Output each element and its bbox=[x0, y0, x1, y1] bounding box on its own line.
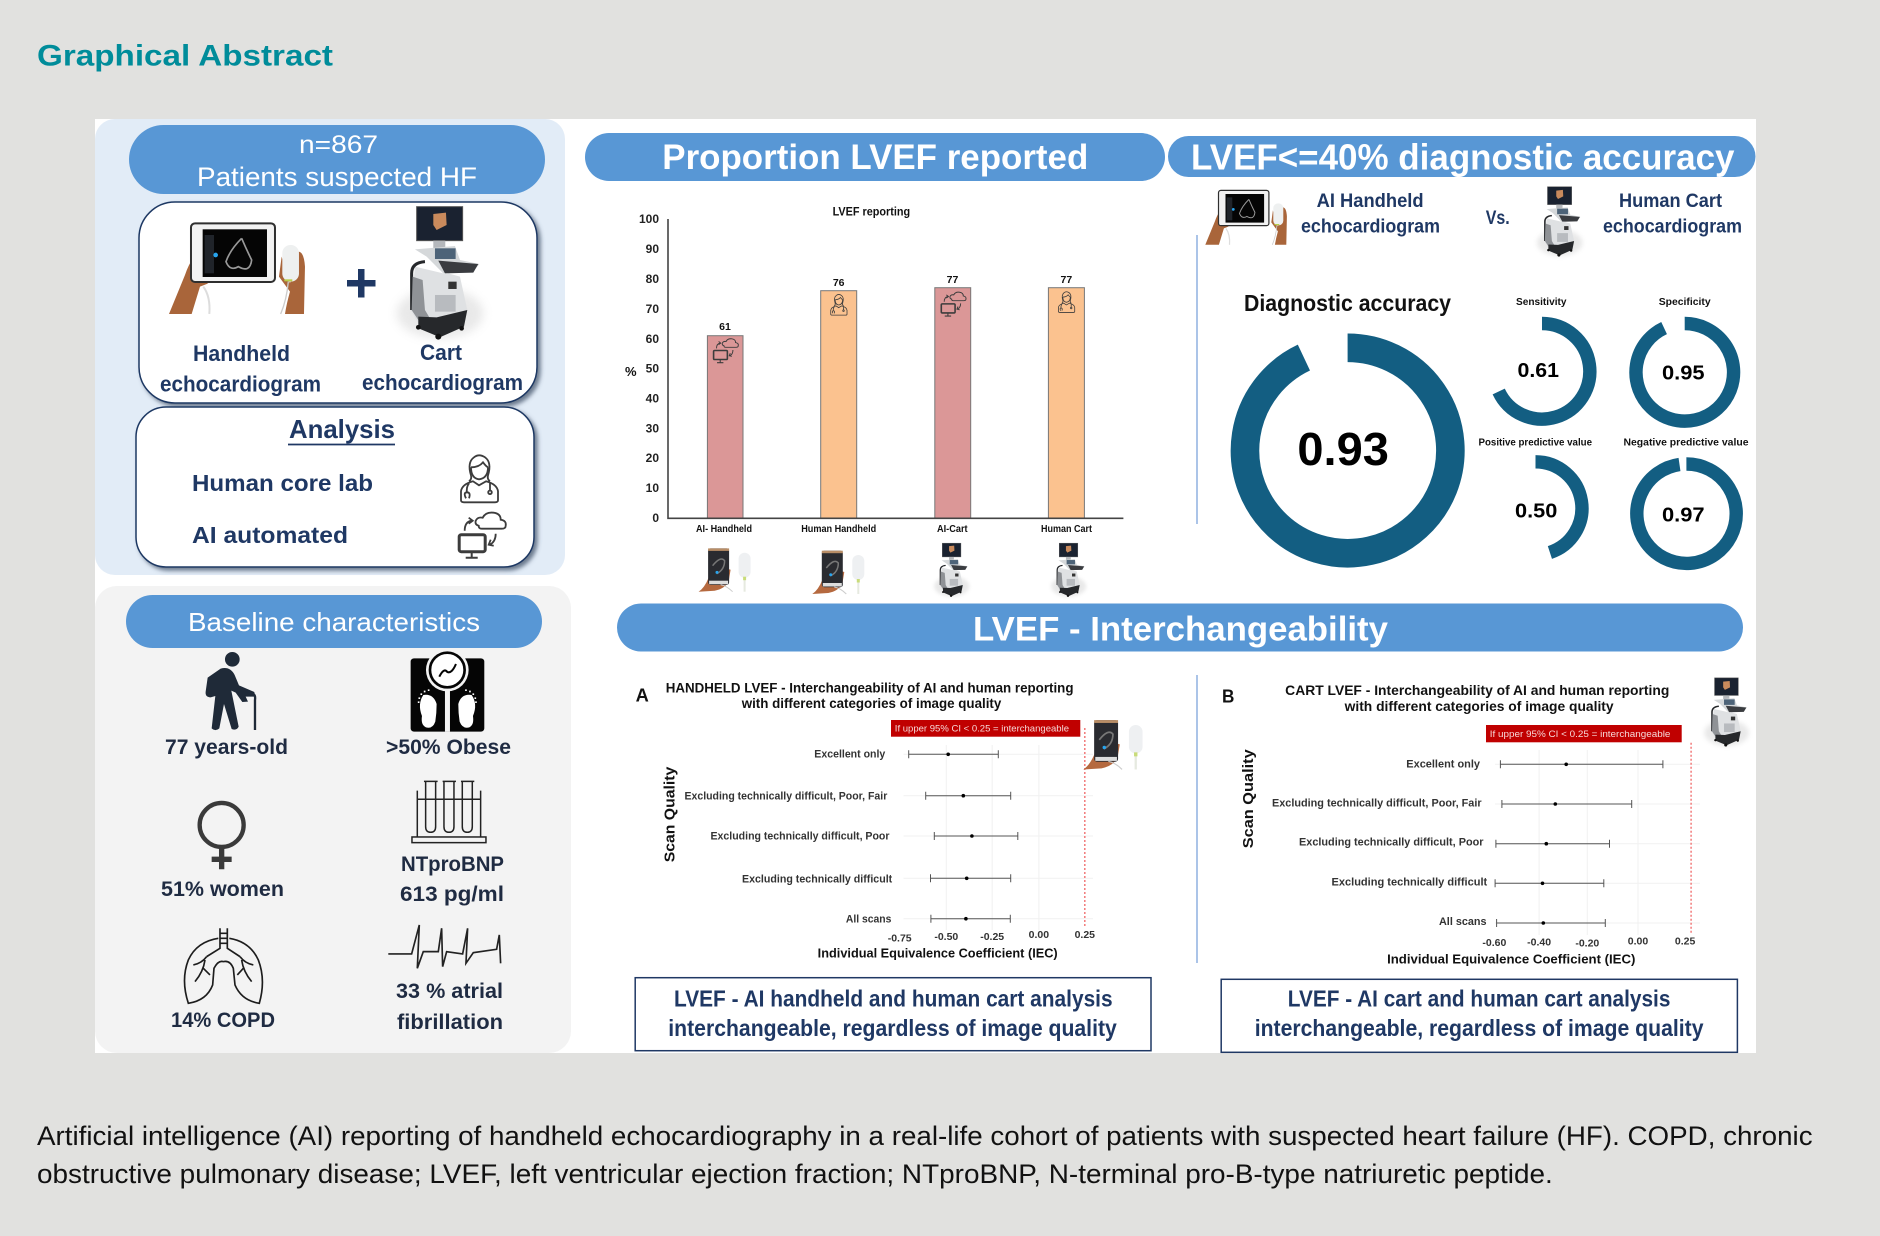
chart title A: HANDHELD LVEF - Interchangeability of AI and human reporting bbox=[666, 680, 1074, 696]
chart title B: CART LVEF - Interchangeability of AI and human reporting bbox=[1285, 683, 1669, 698]
label: human cart: echocardiogram bbox=[1603, 217, 1742, 238]
forest plot B: Excellent only bbox=[1406, 758, 1481, 770]
caption bbox=[37, 1121, 1813, 1189]
bar chart: LVEF reporting bbox=[833, 206, 910, 218]
heading: patients: Patients suspected HF bbox=[197, 162, 477, 192]
forest plot A: -0.25 bbox=[980, 931, 1004, 943]
forest plot A: Excellent only bbox=[814, 749, 886, 761]
label: cart bbox=[362, 340, 523, 395]
forest plot A bbox=[663, 720, 1095, 960]
label: NTproBNP: NTproBNP bbox=[401, 852, 504, 876]
icon: human on bar 4 bbox=[1058, 292, 1075, 312]
icon: human on bar 2 bbox=[831, 294, 847, 315]
bar: human handheld: 76 bbox=[833, 277, 845, 289]
bar: AI cart bbox=[935, 274, 971, 518]
bar: AI cart: 77 bbox=[947, 274, 958, 286]
bar: AI handheld: 61 bbox=[719, 321, 731, 333]
forest plot A: Excluding technically difficult, Poor, Fair bbox=[684, 790, 888, 802]
bar chart: 10 bbox=[646, 481, 659, 495]
forest plot B: Excluding technically difficult, Poor bbox=[1299, 836, 1484, 848]
label: NTproBNP: 613 pg/ml bbox=[400, 882, 504, 906]
bar chart: 50 bbox=[646, 362, 659, 376]
forest plot A: Individual Equivalence Coefficient (IEC) bbox=[818, 946, 1058, 960]
threshold note A: If upper 95% CI < 0.25 = interchangeable bbox=[895, 723, 1069, 734]
forest plot B: -0.40 bbox=[1527, 936, 1551, 948]
donut: positive predictive value 0.50: 0.50 bbox=[1515, 500, 1557, 522]
icon: elderly person with cane bbox=[206, 652, 255, 730]
icon: female symbol bbox=[200, 803, 244, 869]
donut: negative predictive value 0.97 bbox=[1624, 437, 1749, 563]
icon: lungs bbox=[184, 928, 262, 1003]
bar: human cart bbox=[1048, 274, 1084, 518]
forest plot A: 0.00 bbox=[1029, 929, 1049, 941]
forest plot B: Individual Equivalence Coefficient (IEC) bbox=[1387, 952, 1635, 966]
threshold note B bbox=[1486, 725, 1682, 742]
conclusion box B: interchangeable, regardless of image quality bbox=[1255, 1015, 1704, 1041]
label: handheld: echocardiogram bbox=[160, 372, 321, 396]
card: analysis: Human core lab bbox=[192, 470, 373, 496]
bar chart: 60 bbox=[646, 332, 659, 346]
icon: handheld under bar 2 bbox=[812, 551, 864, 594]
label: atrial fibrillation: fibrillation bbox=[397, 1010, 503, 1034]
heading: baseline bbox=[126, 595, 542, 648]
forest plot A: -0.50 bbox=[934, 931, 958, 943]
conclusion box B bbox=[1221, 979, 1737, 1052]
icon: cart under bar 4 bbox=[1051, 543, 1086, 597]
panel letter B: B bbox=[1222, 687, 1234, 707]
panel: study design bbox=[95, 119, 565, 575]
conclusion box A: LVEF - AI handheld and human cart analysis bbox=[674, 986, 1113, 1012]
panel: diagnostic accuracy bbox=[1168, 136, 1756, 563]
donut: diagnostic accuracy 0.93 bbox=[1244, 290, 1451, 553]
donut: positive predictive value 0.50 bbox=[1478, 437, 1592, 552]
label: handheld: Handheld bbox=[193, 341, 290, 366]
panel B: cart interchangeability bbox=[1221, 678, 1749, 1052]
forest plot B: Scan Quality bbox=[1241, 749, 1257, 848]
label: AI handheld: AI Handheld bbox=[1317, 191, 1424, 212]
chart title B bbox=[1285, 683, 1669, 714]
label: NTproBNP bbox=[400, 852, 504, 906]
forest plot B bbox=[1241, 725, 1700, 966]
label: human cart bbox=[1603, 191, 1742, 238]
bar chart: 90 bbox=[646, 242, 659, 256]
label: cart: Cart bbox=[420, 340, 463, 365]
forest plot B: All scans bbox=[1439, 916, 1486, 928]
heading: patients: n=867 bbox=[299, 131, 378, 159]
donut: sensitivity 0.61: 0.61 bbox=[1518, 360, 1559, 382]
label: human cart: Human Cart bbox=[1619, 191, 1723, 212]
icon: AI cloud computer bbox=[459, 513, 506, 558]
forest plot A: 0.25 bbox=[1075, 929, 1095, 941]
forest plot B: Excluding technically difficult bbox=[1332, 876, 1488, 888]
donut: diagnostic accuracy 0.93: Diagnostic accuracy bbox=[1244, 290, 1451, 316]
icon: weighing scale bbox=[411, 649, 484, 732]
title: Graphical Abstract bbox=[37, 40, 333, 72]
panel: proportion LVEF reported bbox=[585, 133, 1165, 597]
x axis labels: Human Handheld bbox=[801, 523, 876, 535]
chart title B: with different categories of image quality bbox=[1344, 699, 1614, 714]
label: AI handheld: echocardiogram bbox=[1301, 217, 1440, 238]
panel: baseline characteristics bbox=[95, 586, 571, 1053]
label: age: 77 years-old bbox=[165, 735, 288, 759]
donut: diagnostic accuracy 0.93: 0.93 bbox=[1297, 423, 1389, 475]
x axis labels: AI-Cart bbox=[937, 523, 968, 535]
heading: proportion bbox=[585, 133, 1165, 181]
conclusion box A: interchangeable, regardless of image quality bbox=[668, 1015, 1117, 1041]
label: handheld bbox=[160, 341, 321, 396]
bar chart: % bbox=[625, 364, 637, 379]
bar: human handheld bbox=[821, 277, 857, 518]
label: atrial fibrillation: 33 % atrial bbox=[396, 979, 503, 1003]
heading: interchangeability: LVEF - Interchangeability bbox=[973, 611, 1388, 649]
white main panel bbox=[95, 119, 1756, 1053]
heading: proportion: Proportion LVEF reported bbox=[662, 138, 1088, 177]
x axis labels bbox=[696, 523, 1092, 535]
forest plot B: -0.20 bbox=[1575, 937, 1599, 949]
bar chart: 20 bbox=[646, 451, 659, 465]
icon: cart machine B bbox=[1704, 678, 1749, 747]
forest plot B: Excluding technically difficult, Poor, Fair bbox=[1272, 798, 1482, 810]
card: analysis bbox=[136, 407, 534, 567]
card: analysis: Analysis bbox=[289, 414, 395, 444]
heading: diagnostic accuracy: LVEF<=40% diagnostic accuracy bbox=[1191, 136, 1734, 177]
conclusion box B: LVEF - AI cart and human cart analysis bbox=[1288, 986, 1670, 1012]
x axis labels: Human Cart bbox=[1041, 523, 1092, 535]
bar chart: 80 bbox=[646, 272, 659, 286]
bar: AI handheld bbox=[707, 321, 743, 518]
label: versus: Vs. bbox=[1486, 208, 1510, 229]
donut: sensitivity 0.61: Sensitivity bbox=[1516, 296, 1567, 308]
label: obese: >50% Obese bbox=[386, 735, 511, 759]
x axis labels: AI- Handheld bbox=[696, 523, 752, 535]
icon: test tubes bbox=[412, 781, 486, 843]
forest plot A: Excluding technically difficult bbox=[742, 873, 893, 885]
donut: positive predictive value 0.50: Positive predictive value bbox=[1478, 437, 1592, 449]
icon: cart under bar 3 bbox=[934, 543, 969, 597]
forest plot A: Scan Quality bbox=[663, 767, 679, 862]
donut: specificity 0.95: 0.95 bbox=[1662, 362, 1705, 384]
donut: specificity 0.95 bbox=[1636, 296, 1734, 421]
heading: baseline: Baseline characteristics bbox=[188, 607, 480, 637]
chart title A bbox=[666, 680, 1074, 711]
panel letter A: A bbox=[636, 686, 649, 706]
icon: handheld phone A bbox=[1083, 720, 1143, 769]
panel A: handheld interchangeability bbox=[635, 680, 1151, 1051]
bar chart: 70 bbox=[646, 302, 659, 316]
threshold note A bbox=[891, 720, 1080, 737]
donut: negative predictive value 0.97: 0.97 bbox=[1662, 504, 1705, 526]
icon: handheld under bar 1 bbox=[699, 548, 751, 592]
heading: interchangeability bbox=[617, 604, 1743, 652]
icon: AI on bar 1 bbox=[714, 339, 738, 363]
bar chart: 30 bbox=[646, 422, 659, 436]
bar chart: 0 bbox=[652, 511, 659, 525]
bar chart: 100 bbox=[639, 212, 659, 226]
chart title A: with different categories of image quality bbox=[741, 696, 1002, 711]
bar chart bbox=[625, 206, 1123, 597]
forest plot A: All scans bbox=[846, 913, 891, 925]
donut: negative predictive value 0.97: Negative predictive value bbox=[1624, 437, 1749, 449]
icon: plus sign bbox=[347, 269, 376, 298]
conclusion box A bbox=[635, 978, 1151, 1051]
icon: human doctor bbox=[461, 455, 498, 502]
label: women: 51% women bbox=[161, 877, 284, 901]
forest plot B: 0.25 bbox=[1675, 936, 1695, 948]
icon: ECG trace bbox=[388, 925, 501, 968]
icon: AI on bar 3 bbox=[941, 292, 966, 316]
bar: human cart: 77 bbox=[1061, 274, 1072, 286]
label: cart: echocardiogram bbox=[362, 370, 523, 395]
bar chart: 40 bbox=[646, 392, 659, 406]
caption: Artificial intelligence (AI) reporting of handheld echocardiography in a real-life cohort of patients with suspected heart failure (HF). COPD, chronic bbox=[37, 1121, 1813, 1151]
icon: handheld tablet echo bbox=[169, 223, 305, 314]
label: COPD: 14% COPD bbox=[171, 1008, 275, 1032]
label: atrial fibrillation bbox=[396, 979, 503, 1034]
donut: sensitivity 0.61 bbox=[1499, 296, 1590, 419]
forest plot B: -0.60 bbox=[1482, 937, 1507, 949]
heading: patients bbox=[129, 125, 545, 194]
donut: specificity 0.95: Specificity bbox=[1659, 296, 1711, 308]
label: AI handheld bbox=[1301, 191, 1440, 238]
card: echocardiogram types bbox=[139, 202, 537, 403]
forest plot B: 0.00 bbox=[1628, 936, 1648, 948]
icon: cart echo machine bbox=[397, 207, 483, 340]
icon: cart machine bbox=[1537, 187, 1582, 257]
forest plot A: -0.75 bbox=[888, 933, 912, 945]
caption: obstructive pulmonary disease; LVEF, left ventricular ejection fraction; NTproBNP, N-terminal pro-B-type natriuretic peptide. bbox=[37, 1159, 1553, 1189]
card: analysis: AI automated bbox=[192, 522, 348, 548]
threshold note B: If upper 95% CI < 0.25 = interchangeable bbox=[1490, 729, 1670, 740]
icon: handheld tablet bbox=[1205, 190, 1287, 245]
forest plot A: Excluding technically difficult, Poor bbox=[710, 830, 890, 842]
